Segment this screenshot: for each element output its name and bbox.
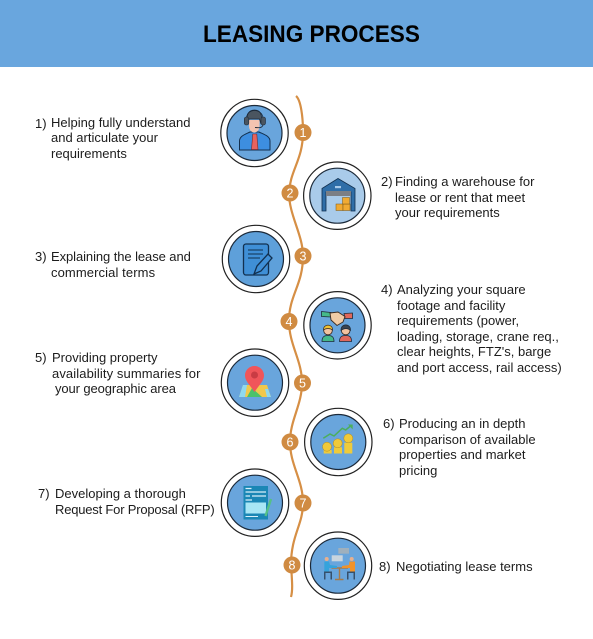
- step 5 text: availability summaries for: [52, 366, 201, 380]
- step 3 text: [35, 249, 191, 280]
- step 2 text: Finding a warehouse for: [395, 174, 534, 189]
- step number 5: 5: [299, 376, 306, 390]
- step number 5: [294, 374, 311, 392]
- step 8 text: Negotiating lease terms: [396, 559, 533, 574]
- header band: [0, 0, 593, 67]
- step 4 text: and port access, rail access): [397, 360, 562, 374]
- step number 4: 4: [286, 315, 293, 329]
- title: LEASING PROCESS: [203, 21, 420, 48]
- icon 3: document and pen: [222, 225, 290, 293]
- icon 2: warehouse: [304, 162, 371, 229]
- step number 7: 7: [300, 496, 307, 510]
- step 6 text: Producing an in depth: [399, 416, 525, 431]
- icon 8: meeting at table: [304, 532, 372, 599]
- step number 1: [294, 124, 312, 141]
- step 2 text: [381, 174, 534, 220]
- step number 8: 8: [289, 558, 296, 572]
- step 7 text: Developing a thorough: [55, 486, 186, 501]
- step 7 text: 7): [38, 486, 50, 501]
- step 5 text: 5): [35, 350, 47, 365]
- step 6 text: 6): [383, 416, 395, 431]
- step number 2: [282, 184, 298, 202]
- step number 3: 3: [300, 250, 307, 264]
- step 4 text: requirements (power,: [397, 313, 519, 328]
- step 2 text: lease or rent that meet: [395, 190, 525, 204]
- step 5 text: [35, 350, 201, 396]
- step number 8: [284, 556, 300, 574]
- step 7 text: Request For Proposal (RFP): [55, 502, 215, 517]
- icon 4: handshake and people: [304, 292, 371, 359]
- step 7 text: [38, 486, 215, 517]
- step 4 text: [381, 282, 562, 374]
- step 1 text: [35, 115, 190, 161]
- step 4 text: clear heights, FTZ's, barge: [397, 344, 551, 359]
- icon 6: growth chart and coins: [305, 408, 372, 476]
- timeline path: [289, 96, 303, 597]
- step 8 text: 8): [379, 559, 391, 574]
- step 4 text: Analyzing your square: [397, 282, 526, 297]
- step 4 text: 4): [381, 282, 393, 297]
- step number 1: 1: [300, 126, 307, 140]
- step 3 text: Explaining the lease and: [51, 249, 191, 264]
- step 6 text: comparison of available: [399, 432, 536, 446]
- step 6 text: pricing: [399, 463, 437, 478]
- step 1 text: Helping fully understand: [51, 115, 190, 130]
- step 1 text: requirements: [51, 146, 127, 161]
- step 2 text: 2): [381, 174, 393, 189]
- step 6 text: [383, 416, 536, 478]
- step number 6: [282, 434, 298, 450]
- icon 1: support agent: [221, 99, 288, 167]
- step number 3: [294, 248, 312, 264]
- step 5 text: your geographic area: [55, 381, 176, 396]
- step number 2: 2: [287, 186, 294, 200]
- step 2 text: your requirements: [395, 205, 500, 220]
- step number 7: [294, 494, 312, 512]
- step number 6: 6: [287, 436, 294, 450]
- step 4 text: loading, storage, crane req.,: [397, 328, 559, 344]
- step 6 text: properties and market: [399, 447, 525, 462]
- step 4 text: footage and facility: [397, 298, 505, 312]
- step number 4: [280, 313, 298, 330]
- step 1 text: 1): [35, 116, 47, 131]
- step 5 text: Providing property: [52, 350, 158, 365]
- step 3 text: commercial terms: [51, 265, 155, 280]
- icon 7: proposal form: [221, 469, 289, 536]
- icon 5: map pin: [221, 349, 289, 416]
- step 3 text: 3): [35, 249, 47, 264]
- step 1 text: and articulate your: [51, 130, 158, 145]
